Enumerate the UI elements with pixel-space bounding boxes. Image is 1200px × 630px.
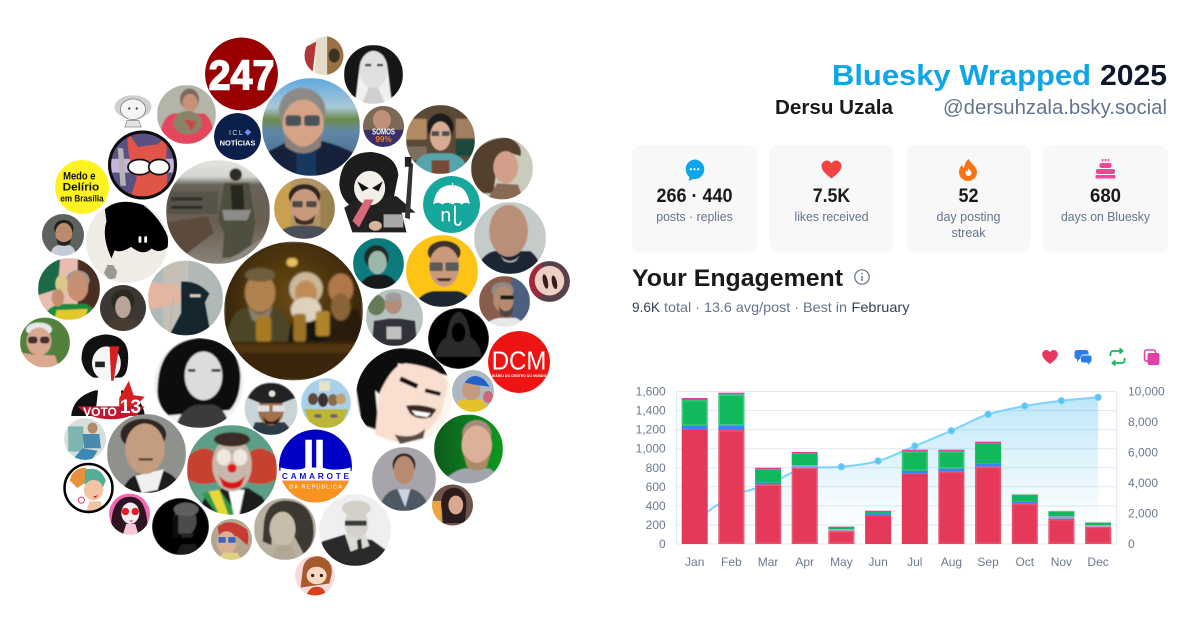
avatar: Marx, Engels and friend with beer: [224, 242, 363, 380]
avatar: man with beer: [38, 258, 100, 320]
cumulative line: [695, 397, 1098, 521]
left axis labels: 600: [646, 480, 666, 494]
avatar: sepia curly woman: [254, 498, 316, 560]
icon: legend likes: [1042, 350, 1058, 364]
engagement summary: 9.6K: [632, 299, 661, 315]
avatar: blue cap: [452, 370, 494, 412]
avatar: woman with books: [406, 105, 475, 174]
avatar: black and white woman: [344, 45, 403, 104]
avatar: big cartoon man: [356, 348, 452, 444]
panel: day posting streak: day posting: [936, 209, 1000, 224]
right axis labels: 4,000: [1128, 476, 1158, 490]
avatar: man in grey cardigan: [372, 447, 436, 511]
avatar: man in car: [42, 214, 84, 256]
avatar: man in band t-shirt: [366, 289, 423, 346]
panel: day posting streak: 52: [958, 186, 978, 207]
avatar: Voto 13: [71, 334, 145, 419]
avatar: Somos 99%: [363, 106, 404, 147]
icon: chat bubble: [686, 160, 704, 181]
avatar cluster: [20, 36, 570, 596]
header: handle: @dersuhzala.bsky.social: [943, 97, 1167, 119]
header: title: Bluesky Wrapped: [832, 60, 1091, 92]
avatar: Camarote da Republica logo: DA REPÚBLICA: [289, 484, 342, 491]
avatar: top small illustration: [304, 36, 344, 75]
heading: your engagement: Your Engagement: [632, 265, 843, 292]
avatar: woman in red: [157, 85, 216, 144]
cumulative area: [695, 397, 1098, 544]
avatar: soldier over ruins: [166, 160, 270, 264]
avatar: Gene Simmons caricature: [339, 152, 416, 232]
avatar: man with glasses: [274, 178, 335, 239]
month labels: Jun: [868, 555, 888, 569]
avatar: red cat with knife: [108, 130, 177, 200]
left axis labels: 200: [646, 518, 666, 532]
avatar: black blob comic: [86, 201, 168, 283]
avatar: DCM logo: DCM: [492, 345, 546, 375]
month labels: Jan: [685, 555, 704, 569]
avatar: Somos 99%: 99%: [375, 135, 392, 144]
avatar: man with sunglasses and brick wall: [479, 276, 530, 327]
left axis labels: 1,000: [636, 442, 666, 456]
avatar: pirate hat man: [244, 382, 298, 435]
avatar: Medo e Delirio em Brasilia: Delírio: [63, 181, 99, 193]
icon: legend reposts: [1110, 348, 1124, 366]
icon: legend replies: [1074, 350, 1092, 365]
avatar: small woman: [432, 484, 473, 526]
avatar: teal-tinted man: [353, 238, 404, 289]
icon: heart: [822, 160, 842, 178]
month labels: Nov: [1051, 555, 1072, 569]
left axis labels: 1,200: [636, 423, 666, 437]
panel: likes received: likes received: [794, 209, 868, 224]
avatar: yellow brain movie poster: [301, 378, 351, 428]
panel: day posting streak: [906, 145, 1031, 253]
left axis labels: 400: [646, 499, 666, 513]
header: display name: Dersu Uzala: [775, 97, 894, 119]
avatar: Camarote da Republica logo: CAMAROTE: [282, 471, 349, 481]
avatar: clown president: [187, 425, 277, 515]
bar: Apr: [792, 452, 818, 544]
bar: Feb: [718, 393, 744, 544]
avatar: woman with curly hair: [471, 138, 533, 200]
right axis labels: 2,000: [1128, 506, 1158, 520]
panel: posts and replies: 266 · 440: [656, 186, 732, 207]
avatar: bald man: [474, 202, 546, 274]
panel: days on Bluesky: [1043, 145, 1168, 253]
bar: May: [828, 526, 854, 544]
avatar: man at lake: [262, 78, 360, 176]
avatar: DCM logo: [488, 331, 550, 393]
engagement summary: [632, 299, 910, 315]
bar: Dec: [1085, 522, 1111, 544]
icon: flame: [959, 159, 977, 181]
bar: Jul: [902, 450, 928, 544]
avatar: man in cap, black and white: [319, 494, 391, 566]
month labels: Sep: [977, 555, 999, 569]
avatar: ICL Noticias: [214, 113, 261, 160]
avatar: Medo e Delirio em Brasilia: Medo e: [63, 170, 95, 182]
grid lines: [676, 392, 1116, 544]
icon: legend quotes: [1144, 350, 1160, 365]
avatar: Voto 13: 13: [120, 397, 141, 418]
avatar: man on green background: [434, 414, 503, 484]
right axis labels: 0: [1128, 537, 1135, 551]
avatar: Somos 99%: SOMOS: [372, 128, 395, 137]
chart: monthly engagement with cumulative line: [636, 384, 1165, 569]
cumulative points: [838, 394, 1101, 470]
month labels: Feb: [721, 555, 742, 569]
engagement summary: February: [852, 299, 910, 315]
month labels: Oct: [1015, 555, 1035, 569]
avatar: man in suit portrait: [107, 414, 186, 493]
right axis labels: 6,000: [1128, 446, 1158, 460]
avatar: teal umbrella logo: [423, 176, 480, 233]
avatar: red-haired woman with glasses: [211, 519, 252, 560]
bar: Jun: [865, 511, 891, 544]
avatar: Carmen Miranda illustration: [63, 462, 114, 514]
month labels: Dec: [1087, 555, 1109, 569]
panel: days on Bluesky: days on Bluesky: [1061, 209, 1150, 224]
bar: Oct: [1012, 494, 1038, 544]
month labels: Jul: [907, 555, 922, 569]
avatar: 247 logo: [205, 38, 278, 110]
avatar: man in shadow: [152, 498, 209, 555]
avatar: small family illustration: [64, 418, 106, 460]
bar: Aug: [938, 450, 964, 544]
panel: posts and replies: [632, 145, 757, 253]
bar: Jan: [682, 398, 708, 544]
panel: day posting streak: streak: [952, 225, 986, 240]
month labels: May: [830, 555, 853, 569]
avatar: 247 logo: 247: [209, 51, 274, 98]
right axis labels: [1128, 384, 1165, 551]
avatar: Medo e Delirio em Brasilia: em Brasília: [60, 194, 104, 204]
avatar: hooded figure: [428, 308, 489, 369]
avatar: cartoon girl: [295, 556, 335, 596]
avatar: ICL Noticias: NOTÍCIAS: [220, 138, 256, 147]
month labels: Mar: [758, 555, 778, 569]
bar: Mar: [755, 468, 781, 544]
avatar: Voto 13: VOTO: [83, 405, 117, 419]
engagement summary: total · 13.6 avg/post · Best in: [664, 299, 847, 315]
stacked bars: [682, 393, 1111, 544]
right axis labels: 8,000: [1128, 415, 1158, 429]
header: title: 2025: [1100, 60, 1167, 92]
avatar: ICL Noticias: ICL: [229, 130, 244, 137]
avatar: heart glasses illustration: [109, 494, 150, 534]
left axis labels: [636, 384, 666, 551]
month labels: [685, 555, 1109, 569]
avatar: pink mask: [529, 261, 570, 302]
icon: info: [855, 270, 869, 284]
month labels: Apr: [795, 555, 814, 569]
panel: likes received: [769, 145, 894, 253]
left axis labels: 0: [659, 537, 666, 551]
bar: Sep: [975, 442, 1001, 544]
panel: posts and replies: posts · replies: [656, 209, 733, 224]
right axis labels: 10,000: [1128, 384, 1165, 398]
panel: likes received: 7.5K: [813, 186, 851, 207]
avatar: woman in helmet: [100, 285, 146, 331]
avatar: Medo e Delirio em Brasilia: [55, 160, 109, 214]
month labels: Aug: [941, 555, 962, 569]
avatar: man on yellow background: [406, 235, 478, 307]
panel: days on Bluesky: 680: [1090, 186, 1121, 207]
chart legend: [1042, 348, 1160, 366]
avatar: teal umbrella logo: n: [440, 205, 451, 227]
avatar: black dog with chain: [148, 260, 223, 336]
bar: Nov: [1048, 511, 1074, 544]
avatar: DCM logo: DIÁRIO DO CENTRO DO MUNDO: [492, 373, 546, 378]
avatar: curly woman in black and white: [154, 338, 244, 428]
left axis labels: 1,600: [636, 384, 666, 398]
left axis labels: 1,400: [636, 404, 666, 418]
avatar: grey doodle: [114, 95, 152, 127]
left axis labels: 800: [646, 461, 666, 475]
avatar: Camarote da Republica logo: [279, 430, 352, 502]
icon: birthday cake: [1096, 159, 1116, 178]
avatar: woman with sunglasses: [20, 318, 70, 368]
